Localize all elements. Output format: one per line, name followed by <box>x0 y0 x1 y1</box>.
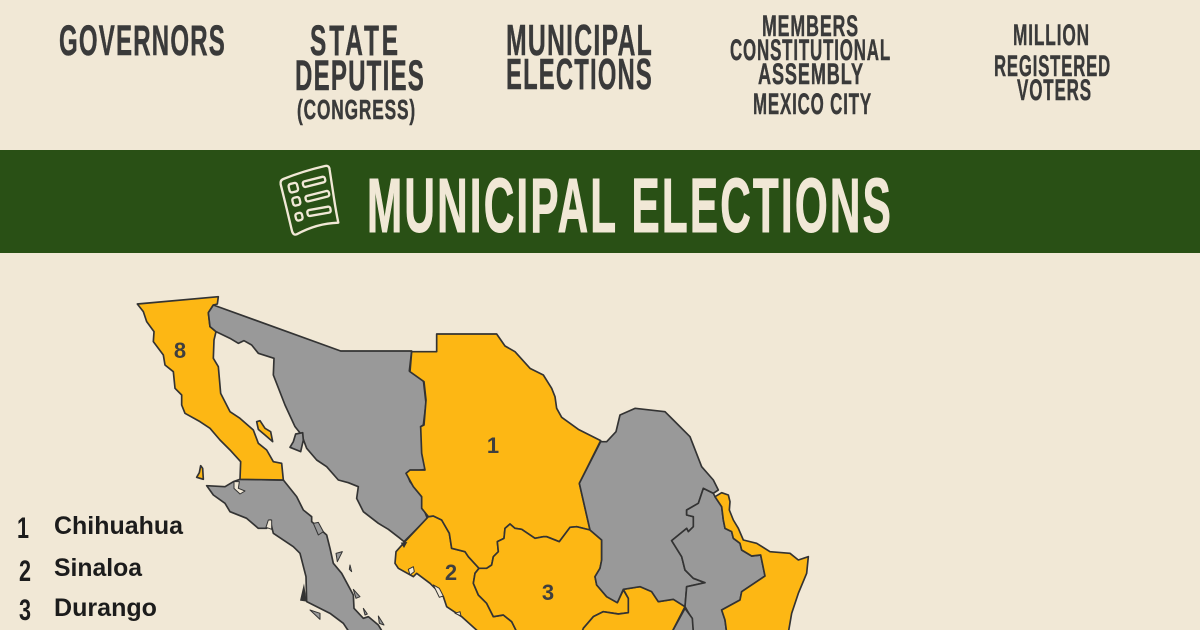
heading: state deputies: STATE <box>310 18 401 65</box>
legend row 2: 2 <box>19 555 31 588</box>
map label 8: 8 <box>174 338 186 363</box>
heading: registered voters <box>994 19 1111 107</box>
heading: municipal elections <box>506 16 653 99</box>
icon: ballot sheet <box>281 166 338 235</box>
heading: constitutional assembly: CONSTITUTIONAL <box>730 34 891 67</box>
heading: constitutional assembly: ASSEMBLY <box>758 58 864 91</box>
state: Baja California (8) <box>137 297 283 480</box>
state: Nuevo Leon <box>672 488 765 630</box>
state: Baja California Sur <box>207 479 383 630</box>
legend row 3: Durango <box>54 594 157 622</box>
state: Chihuahua (1) <box>406 334 601 568</box>
map label 3: 3 <box>542 580 554 605</box>
banner <box>0 150 1200 253</box>
legend row 1 <box>17 512 184 545</box>
map label 2: 2 <box>445 560 457 585</box>
map: north-west states <box>137 297 427 630</box>
heading: registered voters: VOTERS <box>1017 74 1092 107</box>
legend row 1: 1 <box>17 512 29 545</box>
state: Sinaloa (2) <box>395 516 517 630</box>
state: Sonora <box>208 305 427 542</box>
coastal inlets <box>401 542 461 616</box>
heading: registered voters: MILLION <box>1013 19 1090 52</box>
heading: state deputies <box>295 18 425 125</box>
heading: municipal elections: MUNICIPAL <box>506 16 653 65</box>
state: Tamaulipas <box>715 493 808 630</box>
heading: constitutional assembly: MEMBERS <box>762 10 859 43</box>
islands <box>197 421 384 625</box>
legend row 1: Chihuahua <box>54 512 184 540</box>
state: Zacatecas <box>582 587 685 630</box>
legend row 3: 3 <box>19 594 31 627</box>
heading: constitutional assembly: MEXICO CITY <box>753 88 872 121</box>
state: Durango (3) <box>473 524 628 630</box>
heading: governors: GOVERNORS <box>59 18 226 65</box>
heading: registered voters: REGISTERED <box>994 50 1111 83</box>
heading: state deputies: DEPUTIES <box>295 53 425 100</box>
heading: state deputies: (CONGRESS) <box>297 94 416 125</box>
map: central and north-east states <box>395 334 808 630</box>
legend <box>17 512 184 627</box>
legend row 2 <box>19 554 143 588</box>
legend row 2: Sinaloa <box>54 554 143 582</box>
state: San Luis Potosi wedge <box>672 608 693 630</box>
legend row 3 <box>19 594 157 627</box>
heading: constitutional assembly <box>730 10 891 121</box>
map label 1: 1 <box>487 433 499 458</box>
state: Coahuila <box>579 408 718 607</box>
heading: municipal elections: ELECTIONS <box>506 50 653 99</box>
